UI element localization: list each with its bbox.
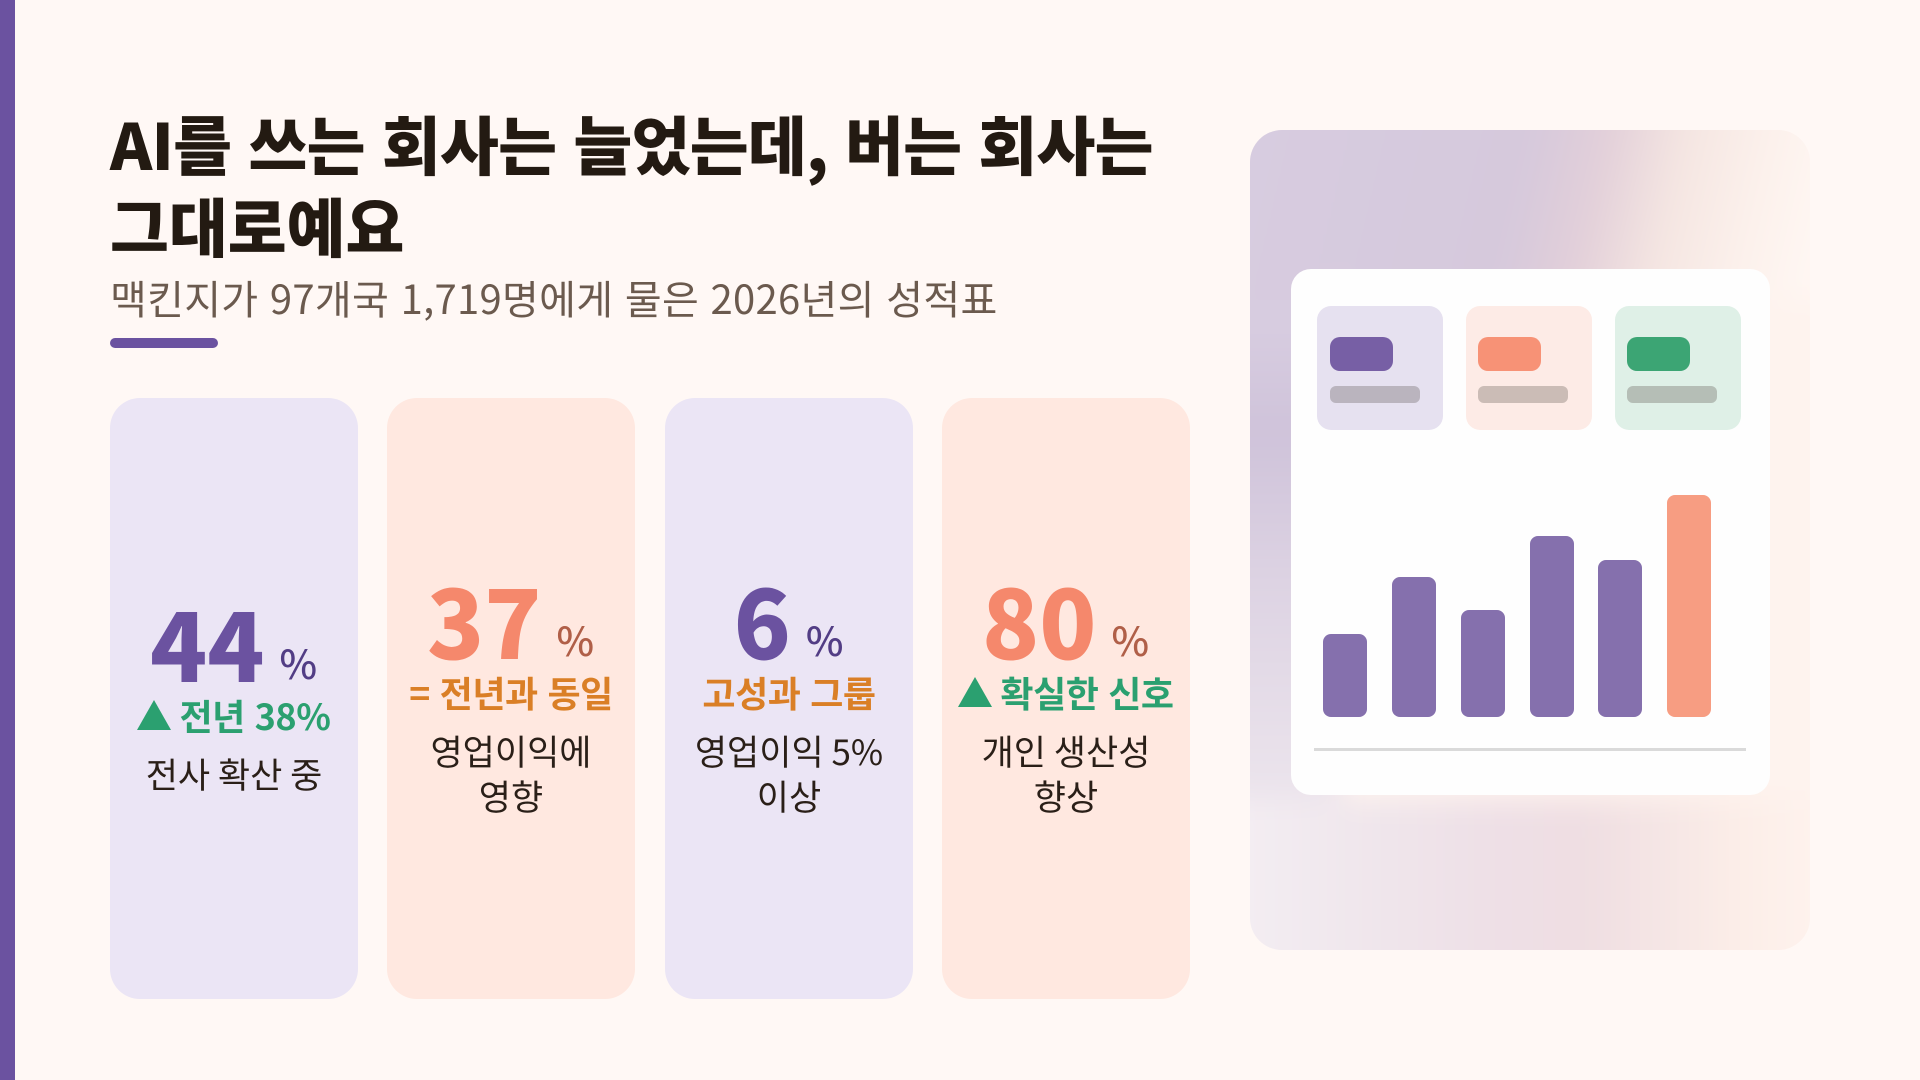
panel: dashboard illustration <box>1250 130 1808 950</box>
label <box>430 725 592 821</box>
panel: stat card 44% <box>110 398 358 998</box>
grey bar <box>1478 386 1568 403</box>
soft gradient backdrop <box>1210 90 1850 990</box>
panel: stat card 80% <box>942 398 1190 998</box>
panel: stat card 37% <box>387 398 635 998</box>
delta: high performers: 고성과 그룹 <box>702 666 876 718</box>
subtitle: 맥킨지가 97개국 1,719명에게 물은 2026년의 성적표 <box>110 268 998 326</box>
label: 영업이익에 <box>430 725 592 776</box>
label <box>695 725 883 821</box>
stat number 44%: 44 % <box>150 574 317 710</box>
label: 영업이익 5% <box>695 725 883 776</box>
mini KPI tile: green <box>1615 306 1741 430</box>
bar chart <box>1314 495 1746 751</box>
stat number 37%: 37 % <box>427 551 594 687</box>
title underline accent <box>110 338 218 348</box>
label <box>982 725 1150 821</box>
delta: same as last year: = 전년과 동일 <box>409 666 613 718</box>
label: 향상 <box>1034 770 1098 821</box>
title: 그대로예요 <box>110 179 404 271</box>
accent side bar <box>0 0 15 1080</box>
panel: stat card 6% <box>665 398 913 998</box>
stat number 80%: 80 % <box>982 551 1149 687</box>
title: AI를 쓰는 회사는 늘었는데, 버는 회사는 <box>110 97 1153 189</box>
title <box>110 97 1153 271</box>
delta: clear signal: 확실한 신호 <box>1000 666 1174 718</box>
purple pill <box>1330 337 1393 371</box>
grey bar <box>1627 386 1717 403</box>
label: 개인 생산성 <box>982 725 1150 776</box>
mini KPI tile: purple <box>1317 306 1443 430</box>
delta: up from 38%: 전년 38% <box>179 689 331 741</box>
white dashboard card <box>1291 269 1770 795</box>
label: 전사 확산 중 <box>146 748 322 799</box>
grey bar <box>1330 386 1420 403</box>
label: 이상 <box>757 770 821 821</box>
coral pill <box>1478 337 1541 371</box>
green pill <box>1627 337 1690 371</box>
stat number 6%: 6 % <box>734 551 843 687</box>
label: 영향 <box>479 770 543 821</box>
mini KPI tile: coral <box>1466 306 1592 430</box>
